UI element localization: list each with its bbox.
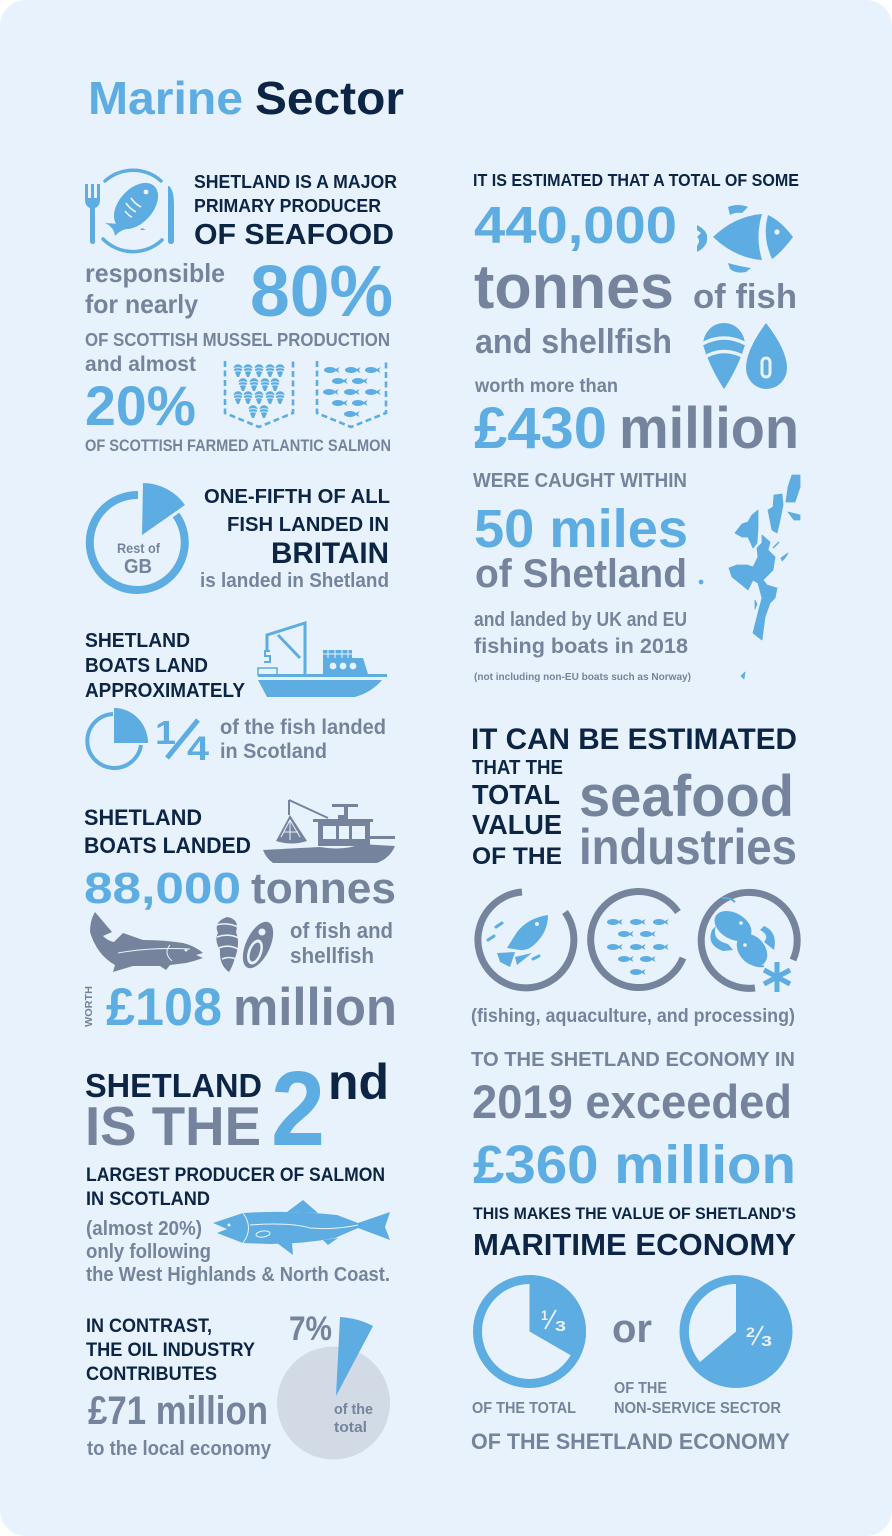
icon: blue fish xyxy=(697,205,793,273)
heading: BOATS LAND xyxy=(85,655,208,677)
text: responsible for nearly: for nearly xyxy=(85,289,199,319)
stat: 430 million pounds: £430 xyxy=(474,396,607,461)
chart: two-thirds pie: 3 xyxy=(761,1333,772,1350)
text: and shellfish: and shellfish xyxy=(475,323,672,361)
text: in contrast: IN CONTRAST, xyxy=(86,1316,212,1337)
icon: crane ship xyxy=(258,623,387,697)
stat: 20%: 20% xyxy=(85,374,196,437)
stat: 88,000 tonnes: 88,000 xyxy=(84,864,241,913)
chart: one-fifth pie xyxy=(90,483,185,590)
text: and almost: and almost xyxy=(85,353,196,376)
stat: 430 million pounds: million xyxy=(619,396,799,461)
text: worth more than: worth more than xyxy=(474,376,618,397)
stat: 108 million pounds: million xyxy=(233,978,397,1037)
text: of the non-service sector xyxy=(614,1380,781,1417)
stat: 2019 exceeded: 2019 exceeded xyxy=(472,1075,792,1128)
text: only following: (almost 20%) xyxy=(86,1218,202,1240)
text: largest producer xyxy=(86,1165,385,1210)
text: or: or xyxy=(612,1307,652,1351)
text: seafood industries: industries xyxy=(579,819,797,875)
text: only following xyxy=(86,1218,390,1286)
chart: one-fifth pie: GB xyxy=(124,556,152,578)
text: seafood industries: seafood xyxy=(579,764,794,829)
text: of fish and shellfish: shellfish xyxy=(290,943,374,968)
chart: quarter pie xyxy=(87,708,148,768)
text: only following: the West Highlands & North Coast. xyxy=(86,1264,390,1286)
heading: Shetland is the 2nd: IS THE xyxy=(85,1095,261,1157)
text: of the fish landed xyxy=(220,716,386,763)
heading: PRIMARY PRODUCER xyxy=(194,196,381,216)
heading: Shetland is the 2nd: SHETLAND xyxy=(85,1067,262,1104)
heading: BRITAIN xyxy=(271,537,389,570)
heading xyxy=(204,485,390,570)
stat: 360 million pounds: £360 million xyxy=(473,1135,796,1195)
heading: Shetland is the 2nd: 2 xyxy=(271,1050,325,1168)
icon: shell and droplet xyxy=(702,323,787,389)
chart: 7 percent pie: of the xyxy=(334,1401,373,1418)
stat: one quarter xyxy=(155,714,209,768)
text: in contrast: CONTRIBUTES xyxy=(86,1364,217,1385)
text: to the local economy: to the local economy xyxy=(87,1438,272,1460)
text: mussel production: OF SCOTTISH MUSSEL PRODUCTION xyxy=(85,330,390,350)
chart: two-thirds pie xyxy=(680,1275,792,1388)
text: were caught within: WERE CAUGHT WITHIN xyxy=(473,470,687,492)
chart: one-fifth pie: Rest of xyxy=(117,540,160,556)
heading xyxy=(84,805,251,858)
stat: 440,000: 440,000 xyxy=(474,197,677,255)
text: worth, rotated: WORTH xyxy=(83,986,95,1027)
icon: plate with fish, fork and knife xyxy=(85,170,174,252)
stat: tonnes of fish: tonnes xyxy=(474,253,674,322)
panel: boats land one quarter xyxy=(85,623,387,768)
stat: one quarter: 4 xyxy=(187,730,209,768)
text: of the Shetland economy: OF THE SHETLAND ECONOMY xyxy=(471,1429,790,1454)
heading: BOATS LANDED xyxy=(84,833,251,858)
stat: tonnes of fish xyxy=(474,253,797,322)
heading: OF THE xyxy=(472,843,562,870)
stat: 71 million pounds: £71 million xyxy=(88,1389,268,1433)
heading xyxy=(85,630,246,702)
text: landed by boats xyxy=(474,609,691,683)
title xyxy=(88,72,404,124)
text: fishing, aquaculture, processing: (fishing, aquaculture, and processing) xyxy=(471,1006,795,1027)
text: largest producer: IN SCOTLAND xyxy=(86,1189,210,1210)
panel: seafood producer xyxy=(85,170,397,455)
text: to the Shetland economy: TO THE SHETLAND ECONOMY IN xyxy=(471,1049,795,1071)
text: of the fish landed: of the fish landed xyxy=(220,716,386,739)
text: in contrast xyxy=(86,1316,255,1385)
text: seafood industries xyxy=(579,764,797,875)
panel: second largest salmon producer xyxy=(85,1050,390,1286)
chart: 7 percent pie: 7% xyxy=(289,1310,332,1348)
heading: Shetland is the 2nd: nd xyxy=(328,1054,389,1110)
text: landed by boats: (not including non-EU boats such as Norway) xyxy=(474,671,691,683)
panel: seafood industries xyxy=(471,723,797,1027)
chart: two-thirds pie: 2 xyxy=(746,1324,755,1340)
heading: ONE-FIFTH OF ALL xyxy=(204,485,390,508)
heading: SHETLAND xyxy=(84,805,202,830)
icon: mussel pocket xyxy=(225,361,293,427)
stat: 88,000 tonnes: tonnes xyxy=(251,864,396,913)
icon: map of Shetland xyxy=(699,475,800,679)
heading: VALUE xyxy=(472,809,562,840)
text: of the non-service sector: NON-SERVICE SECTOR xyxy=(614,1400,781,1417)
text: of fish and shellfish xyxy=(290,918,393,968)
icon: processing circle xyxy=(701,892,797,992)
stat: tonnes of fish: of fish xyxy=(693,278,797,316)
heading xyxy=(194,172,397,251)
heading xyxy=(471,723,797,870)
chart: one-third pie xyxy=(478,1275,586,1384)
heading: THAT THE xyxy=(472,757,563,779)
stat: 108 million pounds xyxy=(106,978,397,1037)
icon: blue salmon xyxy=(213,1200,390,1255)
text: responsible for nearly xyxy=(85,258,225,319)
chart: 7 percent pie xyxy=(277,1310,390,1460)
icon: aquaculture circle xyxy=(591,892,683,988)
text: of the non-service sector: OF THE xyxy=(614,1380,667,1397)
text: of the fish landed: in Scotland xyxy=(220,740,327,763)
heading: IT IS ESTIMATED THAT A TOTAL OF SOME xyxy=(473,170,799,190)
heading: FISH LANDED IN xyxy=(227,514,389,536)
heading: maritime economy xyxy=(473,1204,796,1262)
panel: 360 million pounds xyxy=(471,1049,796,1454)
panel: one-fifth of Britain xyxy=(90,483,390,592)
heading: TOTAL xyxy=(472,779,560,810)
icon: grey salmon xyxy=(90,912,203,972)
chart: one-third pie: 1 xyxy=(541,1307,548,1323)
text: of fish and shellfish: of fish and xyxy=(290,918,393,943)
icon: fishing circle xyxy=(478,892,574,988)
stat: 50 miles: 50 miles xyxy=(474,499,688,559)
heading: SHETLAND xyxy=(85,630,190,652)
panel: oil industry xyxy=(86,1310,390,1460)
heading: maritime economy: THIS MAKES THE VALUE OF SHETLAND'S xyxy=(473,1204,796,1223)
title: Marine xyxy=(88,72,243,124)
text: of the total: OF THE TOTAL xyxy=(472,1400,576,1417)
heading: APPROXIMATELY xyxy=(85,680,246,702)
stat: one quarter: 1 xyxy=(155,714,176,751)
chart: 7 percent pie: total xyxy=(334,1419,367,1436)
heading: OF SEAFOOD xyxy=(194,219,394,251)
text: largest producer: LARGEST PRODUCER OF SALMON xyxy=(86,1165,385,1186)
title: Sector xyxy=(255,72,404,124)
text: in contrast: THE OIL INDUSTRY xyxy=(86,1340,255,1361)
icon: mussels xyxy=(216,917,279,973)
icon: trawler xyxy=(263,800,395,863)
text: only following: only following xyxy=(86,1241,211,1263)
panel: 88,000 tonnes xyxy=(83,800,397,1037)
icon: salmon pocket xyxy=(317,361,386,427)
stat: 108 million pounds: £108 xyxy=(106,978,222,1037)
stat: of Shetland: of Shetland xyxy=(475,552,687,596)
heading: Shetland is the 2nd xyxy=(85,1050,389,1168)
heading: SHETLAND IS A MAJOR xyxy=(194,172,397,192)
chart: one-third pie: 3 xyxy=(555,1318,566,1335)
text: farmed salmon: OF SCOTTISH FARMED ATLANTIC SALMON xyxy=(85,437,391,455)
heading: maritime economy: MARITIME ECONOMY xyxy=(473,1227,796,1262)
stat: 88,000 tonnes xyxy=(84,864,396,913)
stat: 430 million pounds xyxy=(474,396,799,461)
text: landed by boats: fishing boats in 2018 xyxy=(474,635,688,658)
heading: IT CAN BE ESTIMATED xyxy=(471,723,797,756)
text: is landed in Shetland: is landed in Shetland xyxy=(200,570,389,592)
text: landed by boats: and landed by UK and EU xyxy=(474,609,687,631)
panel: 440,000 tonnes xyxy=(473,170,799,461)
stat: 80%: 80% xyxy=(250,252,393,332)
panel: 50 miles of Shetland xyxy=(473,470,800,683)
text: responsible for nearly: responsible xyxy=(85,258,225,288)
